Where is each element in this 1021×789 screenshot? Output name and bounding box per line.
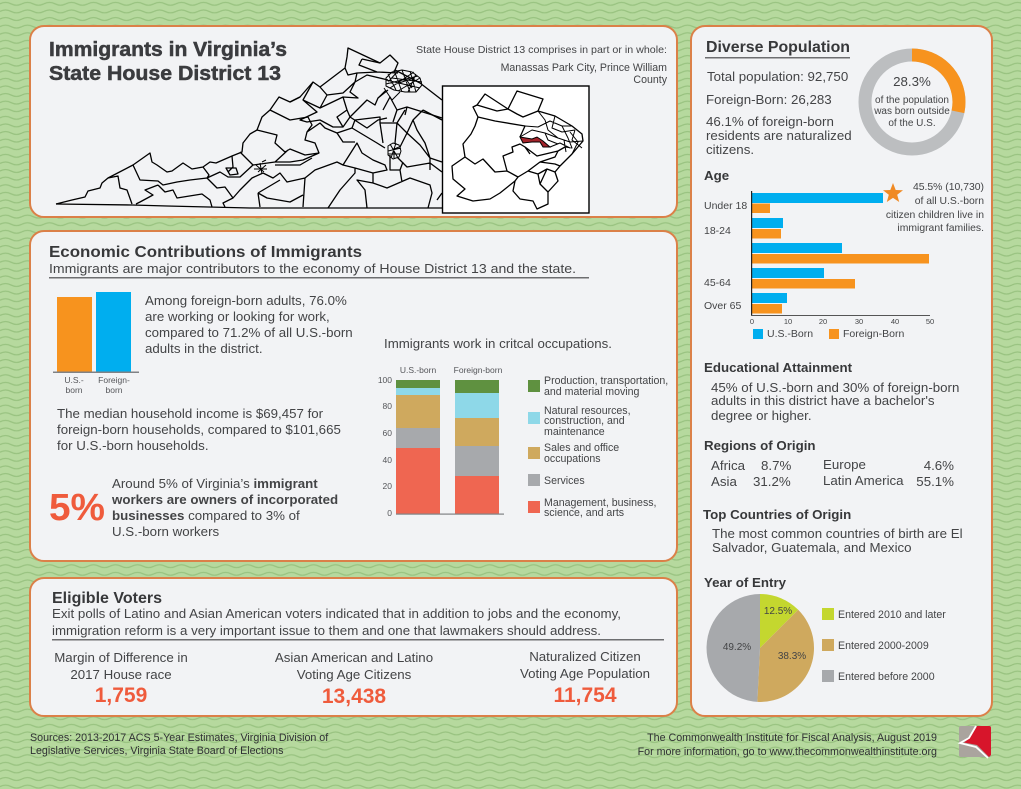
- callout: citizen children: citizen children live in: [886, 210, 984, 221]
- text: household income: foreign-born households, compared to $101,665: [57, 422, 341, 437]
- text: population: [706, 69, 852, 157]
- stat: naturalized: [520, 649, 650, 707]
- legend: occupations: Services: [544, 475, 585, 487]
- callout: 5% business owners: [49, 476, 338, 539]
- sources: Sources: 2013-2017 ACS 5-Year Estimates, Virginia Division of: [30, 732, 328, 744]
- text: labor force: adults in the district.: [145, 341, 263, 356]
- legend: occupations: Natural resources,: [544, 405, 631, 417]
- bar chart: labor force: born: [105, 385, 123, 395]
- regions of origin: [704, 438, 954, 489]
- legend: occupations: Production, transportation,: [544, 375, 668, 387]
- stacked bar chart: occupations: 80: [383, 401, 392, 411]
- panel: economic contributions: [30, 231, 677, 561]
- stat: margin: 2017 House race: [70, 667, 172, 682]
- legend: occupations: Management, business,: [544, 497, 656, 509]
- educational attainment: 45% of U.S.-born and 30% of foreign-born: [711, 380, 959, 395]
- callout: citizen children: 45.5% (10,730): [913, 182, 984, 193]
- legend: occupations: Sales and office: [544, 442, 619, 454]
- stacked bar chart: occupations: 100: [378, 375, 392, 385]
- stat: naturalized: 11,754: [553, 684, 617, 707]
- text: population: Total population: 92,750: [707, 69, 848, 84]
- legend: occupations: [528, 375, 668, 519]
- map: Virginia house districts: [56, 48, 442, 208]
- panel: header: [30, 26, 677, 217]
- bar chart: age: 40: [891, 317, 899, 326]
- legend: occupations: science, and arts: [544, 507, 624, 519]
- credit: The Commonwealth Institute for Fiscal Analysis, August 2019: [647, 732, 937, 744]
- stat: margin: [54, 650, 188, 707]
- bar chart: age: 18-24: [704, 225, 731, 237]
- callout: citizen children: of all U.S.-born: [915, 196, 984, 207]
- bar chart: labor force: U.S.-: [64, 375, 84, 385]
- stacked bar chart: occupations: Foreign-born: [454, 365, 503, 375]
- top countries: Salvador, Guatemala, and Mexico: [712, 540, 912, 555]
- text: exit polls: immigration reform is a very important issue to them and one that lawmakers should address.: [52, 623, 601, 638]
- donut chart: of the U.S.: [888, 118, 936, 129]
- highlighted district: [520, 137, 550, 147]
- bar chart: labor force: born: [65, 385, 83, 395]
- title: [49, 39, 287, 85]
- stat: voting age citizens: [275, 650, 433, 708]
- stacked bar chart: occupations: 20: [383, 481, 392, 491]
- stat: voting age citizens: Asian American and Latino: [275, 650, 433, 665]
- pie chart: year of entry: 49.2%: [723, 642, 751, 653]
- text: household income: for U.S.-born households.: [57, 438, 209, 453]
- stacked bar chart: occupations: [378, 365, 504, 518]
- callout: citizen children: immigrant families.: [897, 223, 984, 234]
- educational attainment: degree or higher.: [711, 408, 812, 423]
- heading: Diverse Population: [706, 39, 850, 56]
- text: labor force: are working or looking for work,: [145, 309, 330, 324]
- callout: citizen children: [886, 182, 984, 234]
- educational attainment: Educational Attainment: [704, 360, 853, 375]
- legend: occupations: construction, and: [544, 415, 625, 427]
- legend: year of entry: [822, 608, 946, 683]
- educational attainment: [704, 360, 959, 423]
- donut chart: [865, 55, 959, 149]
- text: labor force: compared to 71.2% of all U.S.-born: [145, 325, 353, 340]
- bar chart: age: [704, 191, 934, 340]
- district description: State House District 13 comprises in part or in whole:: [416, 44, 667, 56]
- stat: margin: 1,759: [95, 684, 147, 707]
- text: population: 46.1% of foreign-born: [706, 114, 834, 129]
- heading: Immigrants are major contributors to the economy of House District 13 and the state.: [49, 261, 576, 276]
- regions of origin: 4.6%: [924, 458, 954, 473]
- donut chart: of the population: [875, 95, 949, 106]
- regions of origin: 55.1%: [916, 474, 954, 489]
- stat: naturalized: Voting Age Population: [520, 666, 650, 681]
- credit: [638, 732, 937, 758]
- icon: star: [883, 183, 903, 202]
- regions of origin: Latin America: [823, 473, 904, 488]
- stacked bar chart: occupations: U.S.-born: [400, 365, 436, 375]
- sources: Legislative Services, Virginia State Board of Elections: [30, 745, 283, 757]
- map inset: district 13: [442, 86, 589, 213]
- pie chart: year of entry: [707, 594, 814, 702]
- text: exit polls: Exit polls of Latino and Asian American voters indicated that in addition to jobs and the economy,: [52, 606, 621, 621]
- icon: logo: [959, 726, 991, 758]
- text: household income: The median household income is $69,457 for: [57, 406, 324, 421]
- regions of origin: Asia: [711, 474, 737, 489]
- stat: voting age citizens: 13,438: [322, 685, 386, 708]
- panel: diverse population: [691, 26, 992, 716]
- regions of origin: Europe: [823, 457, 866, 472]
- text: exit polls: [52, 606, 664, 640]
- bar chart: age: 45-64: [704, 277, 731, 289]
- callout: 5% business owners: 5%: [49, 487, 105, 529]
- credit: For more information, go to www.thecommonwealthinstitute.org: [638, 746, 937, 758]
- text: labor force: [145, 293, 353, 356]
- stat: naturalized: Naturalized Citizen: [529, 649, 641, 664]
- callout: 5% business owners: Around 5% of Virginia’s immigrant: [112, 476, 318, 491]
- stacked bar chart: occupations: 0: [387, 508, 392, 518]
- heading: age: Age: [704, 168, 729, 183]
- bar chart: age: U.S.-Born: [767, 328, 813, 340]
- panel: eligible voters: [30, 578, 677, 716]
- title: State House District 13: [49, 63, 281, 85]
- heading: Economic Contributions of Immigrants: [49, 244, 362, 261]
- district description: County: [633, 74, 668, 86]
- stat: margin: Margin of Difference in: [54, 650, 188, 665]
- top countries: The most common countries of birth are El: [712, 526, 963, 541]
- bar chart: age: 20: [819, 317, 827, 326]
- text: population: residents are naturalized: [706, 128, 852, 143]
- stacked bar chart: occupations: 40: [383, 455, 392, 465]
- bar chart: age: Over 65: [704, 300, 742, 312]
- district description: [416, 44, 668, 86]
- bar chart: age: Foreign-Born: [843, 328, 904, 340]
- regions of origin: 31.2%: [753, 474, 791, 489]
- bar chart: age: 0: [750, 317, 754, 326]
- title: Immigrants in Virginia’s: [49, 39, 287, 61]
- heading: [49, 244, 589, 278]
- regions of origin: Africa: [711, 458, 746, 473]
- pie chart: year of entry: 38.3%: [778, 651, 806, 662]
- district description: Manassas Park City, Prince William: [501, 62, 667, 74]
- callout: 5% business owners: workers are owners of incorporated: [111, 492, 338, 507]
- text: population: Foreign-Born: 26,283: [706, 92, 832, 107]
- legend: year of entry: Entered 2000-2009: [838, 640, 929, 652]
- donut chart: was born outside: [873, 106, 950, 117]
- sources: [30, 732, 328, 757]
- heading: Eligible Voters: [52, 590, 162, 607]
- top countries: Top Countries of Origin: [703, 507, 851, 522]
- bar chart: labor force: [53, 292, 139, 395]
- legend: year of entry: Entered 2010 and later: [838, 609, 946, 621]
- callout: 5% business owners: U.S.-born workers: [112, 524, 219, 539]
- educational attainment: adults in this district have a bachelor's: [711, 393, 935, 408]
- text: household income: [57, 406, 341, 453]
- donut chart: 28.3%: [893, 74, 931, 89]
- bar chart: age: 50: [926, 317, 934, 326]
- regions of origin: 8.7%: [761, 458, 791, 473]
- heading: year of entry: Year of Entry: [704, 575, 787, 590]
- stat: voting age citizens: Voting Age Citizens: [297, 667, 412, 682]
- text: critical occupations: Immigrants work in critcal occupations.: [384, 337, 612, 351]
- bar chart: age: Under 18: [704, 200, 747, 212]
- legend: occupations: maintenance: [544, 426, 605, 438]
- legend: occupations: occupations: [544, 453, 601, 465]
- pie chart: year of entry: 12.5%: [764, 606, 792, 617]
- bar chart: age: 10: [784, 317, 792, 326]
- text: population: citizens.: [706, 142, 754, 157]
- bar chart: labor force: Foreign-: [98, 375, 130, 385]
- legend: year of entry: Entered before 2000: [838, 671, 935, 683]
- bar chart: age: 30: [855, 317, 863, 326]
- text: labor force: Among foreign-born adults, 76.0%: [145, 293, 347, 308]
- top countries: [703, 507, 963, 555]
- legend: occupations: and material moving: [544, 386, 639, 398]
- stacked bar chart: occupations: 60: [383, 428, 392, 438]
- callout: 5% business owners: businesses compared to 3% of: [112, 508, 300, 523]
- regions of origin: Regions of Origin: [704, 438, 816, 453]
